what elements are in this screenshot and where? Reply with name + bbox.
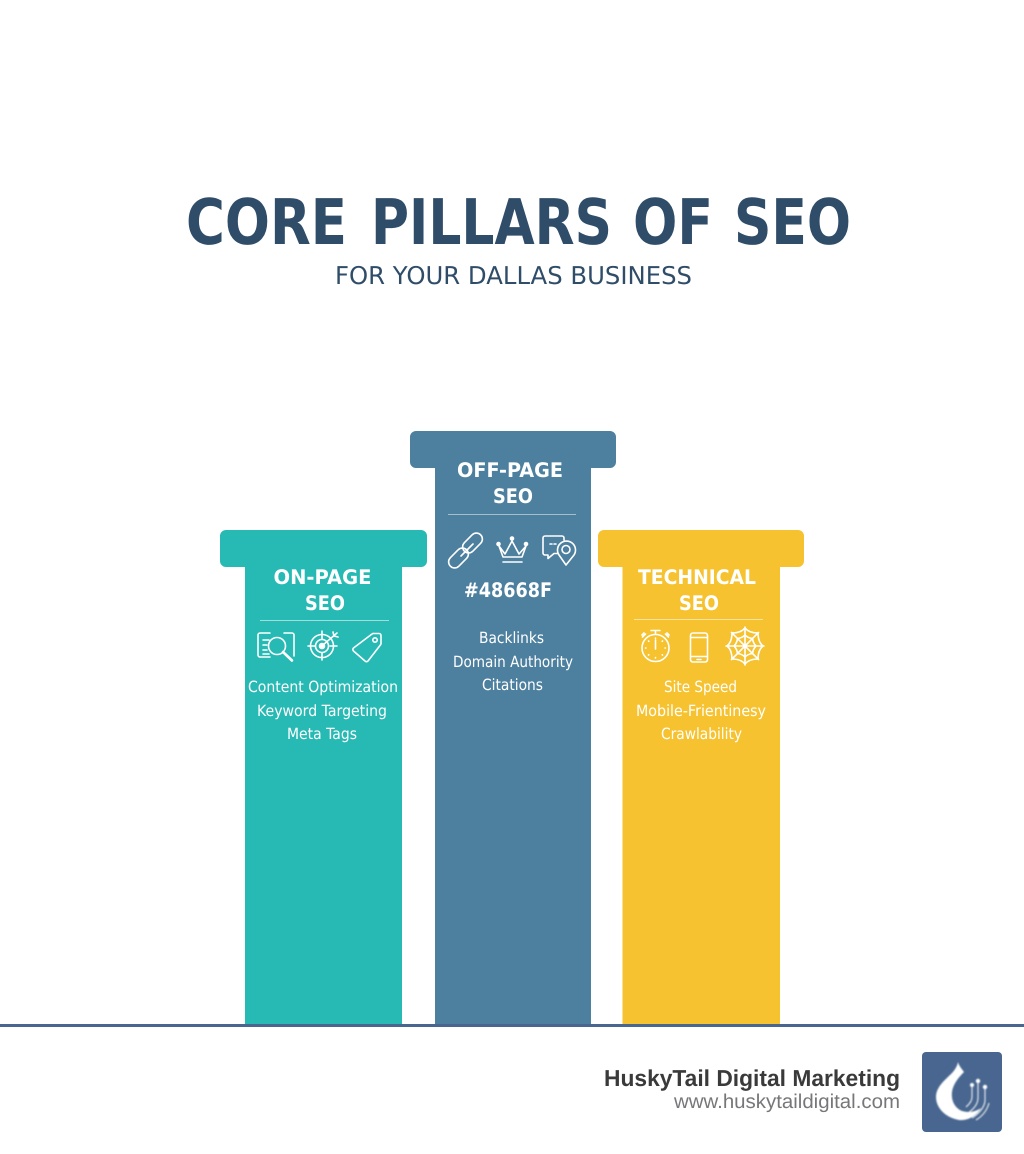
- heading: off-page SEO: [457, 458, 563, 508]
- title: PILLARS: [371, 186, 612, 259]
- icon: spider web: [726, 627, 764, 665]
- text: hex code label: #48668F: [464, 578, 552, 602]
- icon: stopwatch: [642, 630, 669, 662]
- icon: backlink chain: [446, 531, 485, 570]
- icon: mobile phone: [690, 633, 708, 662]
- text: on-page items: Content Optimization: [248, 678, 398, 696]
- text: off-page items: Backlinks: [479, 629, 544, 647]
- text: off-page items: [453, 629, 573, 694]
- icon: content magnifier: [258, 633, 294, 660]
- heading: on-page SEO: SEO: [305, 591, 345, 615]
- panel: technical SEO pillar: [598, 530, 804, 1025]
- text: off-page items: Domain Authority: [453, 653, 573, 671]
- text: technical items: [636, 678, 766, 743]
- heading: technical SEO: SEO: [679, 591, 719, 615]
- subtitle: FOR YOUR DALLAS BUSINESS: [335, 261, 692, 290]
- panel: off-page SEO pillar: [410, 431, 616, 1025]
- icon: citation chat and pin: [543, 536, 576, 565]
- icon: keyword target: [308, 631, 338, 660]
- title: SEO: [734, 186, 851, 259]
- heading: technical SEO: [638, 565, 756, 615]
- heading: on-page SEO: ON-PAGE: [274, 565, 372, 589]
- text: technical items: Site Speed: [664, 678, 737, 696]
- text: technical items: Mobile-Frientinesy: [636, 702, 766, 720]
- icon: HuskyTail logo: [922, 1052, 1002, 1132]
- title: CORE: [186, 186, 347, 259]
- heading: technical SEO: TECHNICAL: [638, 565, 756, 589]
- pillar shape: teal: [220, 530, 427, 1025]
- text: on-page items: Meta Tags: [287, 725, 357, 743]
- footer divider line: [0, 1024, 1024, 1027]
- pillar shape: blue: [410, 431, 616, 1025]
- footer website url: www.huskytaildigital.com: [673, 1091, 900, 1113]
- footer brand name: HuskyTail Digital Marketing: [604, 1065, 900, 1091]
- title: OF: [633, 186, 713, 259]
- icon: authority crown: [497, 537, 528, 562]
- pillar shape: yellow: [598, 530, 804, 1025]
- text: off-page items: Citations: [482, 676, 543, 694]
- heading: on-page SEO: [274, 565, 372, 615]
- title: [186, 186, 851, 259]
- heading: off-page SEO: SEO: [493, 484, 533, 508]
- text: on-page items: [248, 678, 398, 743]
- text: on-page items: Keyword Targeting: [257, 702, 387, 720]
- heading: off-page SEO: OFF-PAGE: [457, 458, 563, 482]
- text: technical items: Crawlability: [661, 725, 742, 743]
- panel: on-page SEO pillar: [220, 530, 427, 1025]
- icon: meta tag: [353, 633, 381, 662]
